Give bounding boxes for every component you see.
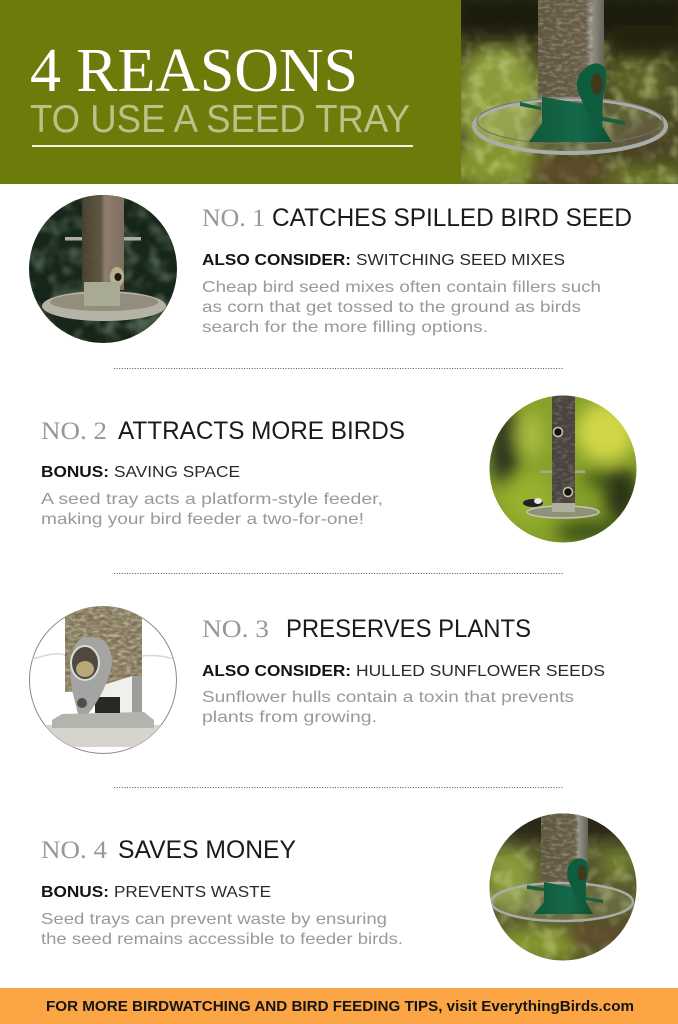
subheading 3: [202, 663, 605, 680]
heading 4: NO. 4: [41, 837, 108, 864]
photo circle 4: green feeder with tray: [490, 814, 636, 960]
title: 4 reasons: 4 REASONS: [30, 37, 358, 105]
green perches: [520, 102, 625, 125]
heading 1: CATCHES SPILLED BIRD SEED: [272, 204, 632, 232]
heading 2: ATTRACTS MORE BIRDS: [118, 417, 405, 445]
feeder tube: [538, 0, 604, 108]
base: [534, 882, 593, 914]
heading 3: PRESERVES PLANTS: [286, 615, 531, 643]
heading 2: NO. 2: [41, 418, 107, 445]
tube: [541, 813, 588, 887]
header photo: green feeder with tray: [450, 0, 678, 190]
subheading 1: [202, 252, 565, 269]
body text 3: plants from growing.: [202, 709, 377, 726]
footer bar: [0, 988, 678, 1024]
body text 1: as corn that get tossed to the ground as birds: [202, 299, 581, 316]
footer bar: FOR MORE BIRDWATCHING AND BIRD FEEDING TIPS, visit EverythingBirds.com: [46, 999, 634, 1015]
heading 4: SAVES MONEY: [118, 836, 296, 864]
photo circle 2: slim feeder with bird, green foliage: [489, 395, 640, 544]
subheading 2: BONUS:: [41, 464, 109, 481]
body text 1: [202, 279, 601, 336]
body text 1: Cheap bird seed mixes often contain fillers such: [202, 279, 601, 296]
heading 4: [41, 836, 296, 864]
body text 2: A seed tray acts a platform-style feeder,: [41, 491, 383, 508]
subheading 3: ALSO CONSIDER:: [202, 663, 351, 680]
photo circle 1: feeder with tray, dark background: [29, 195, 177, 343]
photo circle 3: close-up of silver port: [30, 606, 176, 754]
title underline: [32, 145, 413, 147]
body text 4: [41, 911, 403, 948]
header title panel: [0, 0, 461, 184]
seed tray: [474, 98, 666, 153]
perches: [527, 885, 603, 903]
body text 3: [202, 689, 574, 726]
body text 4: Seed trays can prevent waste by ensuring: [41, 911, 387, 928]
body text 2: making your bird feeder a two-for-one!: [41, 511, 364, 528]
body text 4: the seed remains accessible to feeder birds.: [41, 931, 403, 948]
bird: [523, 498, 543, 507]
subheading 3: HULLED SUNFLOWER SEEDS: [356, 663, 605, 680]
subheading 2: [41, 464, 240, 481]
port: [567, 858, 588, 891]
body text 2: [41, 491, 383, 528]
subtitle: to use a seed tray: TO USE A SEED TRAY: [30, 98, 410, 141]
subheading 4: [41, 884, 271, 901]
subheading 1: SWITCHING SEED MIXES: [356, 252, 565, 269]
heading 3: NO. 3: [202, 616, 269, 643]
subheading 2: SAVING SPACE: [114, 464, 240, 481]
header banner: [0, 0, 678, 190]
subheading 4: BONUS:: [41, 884, 109, 901]
body text 3: Sunflower hulls contain a toxin that prevents: [202, 689, 574, 706]
section 1: catches spilled bird seed: [29, 195, 177, 343]
heading 1: NO. 1: [202, 205, 265, 232]
tray: [491, 883, 633, 921]
body text 1: search for the more filling options.: [202, 319, 488, 336]
subheading 4: PREVENTS WASTE: [114, 884, 271, 901]
subheading 1: ALSO CONSIDER:: [202, 252, 351, 269]
green feeding port: [577, 63, 606, 130]
green base: [529, 97, 612, 142]
